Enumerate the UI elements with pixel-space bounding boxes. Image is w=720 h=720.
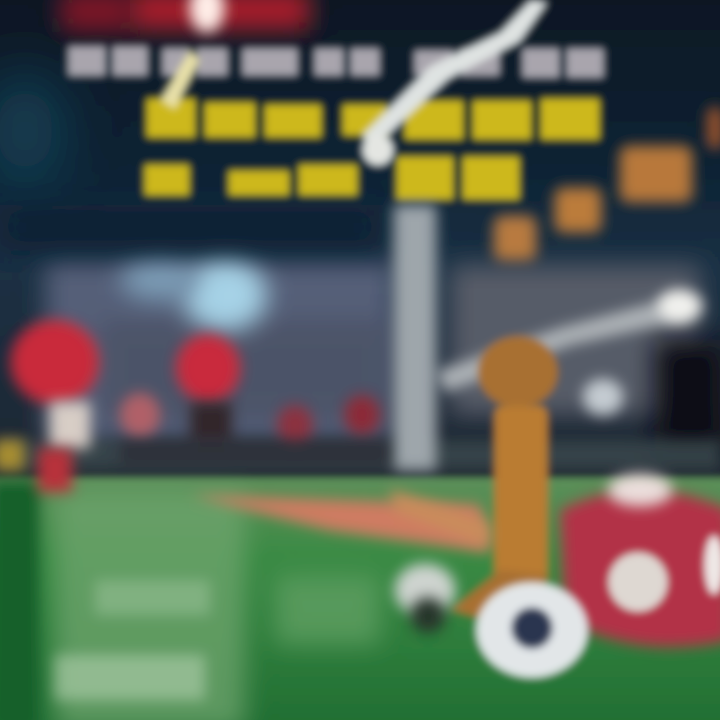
orange badges [494,108,720,260]
trophy [390,336,558,630]
small soccer ball [395,564,588,678]
red players [0,320,390,492]
goal post and white streak [160,0,702,470]
pitch [0,478,720,720]
red and white ball [560,474,720,647]
stadium background [0,0,720,500]
heading: yellow lines [144,98,600,200]
heading: white line [68,46,604,78]
